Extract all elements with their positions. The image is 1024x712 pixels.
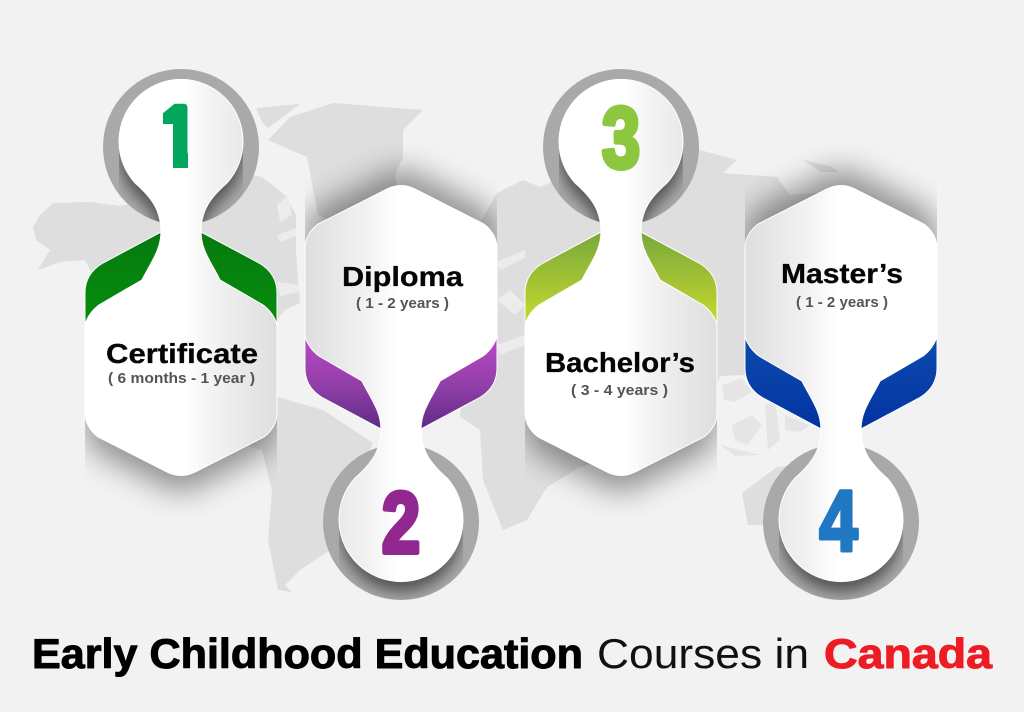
duration: 3 - 4 years: ( 3 - 4 years ) [571, 382, 668, 399]
number 3: 3 [602, 90, 640, 186]
title: Courses in [597, 630, 809, 677]
card shape 4 [745, 186, 937, 582]
duration: 1 - 2 years: ( 1 - 2 years ) [356, 295, 449, 312]
title [32, 630, 993, 677]
card shape 2 [305, 186, 497, 582]
card shadow 2 [305, 152, 497, 243]
number ring 1 [103, 69, 259, 222]
number 1: 1 [159, 91, 197, 185]
title: Canada [824, 630, 993, 677]
step 1: Certificate [85, 69, 277, 492]
number 2: 2 [382, 475, 420, 571]
heading: Master's: Master’s [781, 258, 903, 289]
step 4: Master's [745, 170, 937, 600]
step 2: Diploma [305, 170, 497, 600]
number ring 3 [543, 69, 699, 222]
number ring 2 [323, 444, 479, 600]
world map [33, 103, 880, 592]
heading: Bachelor's: Bachelor’s [545, 347, 695, 378]
heading: Diploma: Diploma [342, 261, 463, 292]
number 4: 4 [819, 473, 858, 569]
duration: 1 - 2 years: ( 1 - 2 years ) [796, 294, 888, 311]
card shape 3 [525, 79, 717, 475]
card shape 1 [85, 79, 277, 475]
card shadow 1 [85, 418, 277, 508]
heading: Certificate: Certificate [106, 338, 258, 369]
step 3: Bachelor's [525, 69, 717, 492]
duration: 6 months - 1 year: ( 6 months - 1 year ) [108, 370, 255, 387]
number ring 4 [763, 444, 919, 600]
card shadow 4 [745, 152, 937, 243]
title: Early Childhood Education [32, 630, 583, 677]
card shadow 3 [525, 418, 717, 508]
